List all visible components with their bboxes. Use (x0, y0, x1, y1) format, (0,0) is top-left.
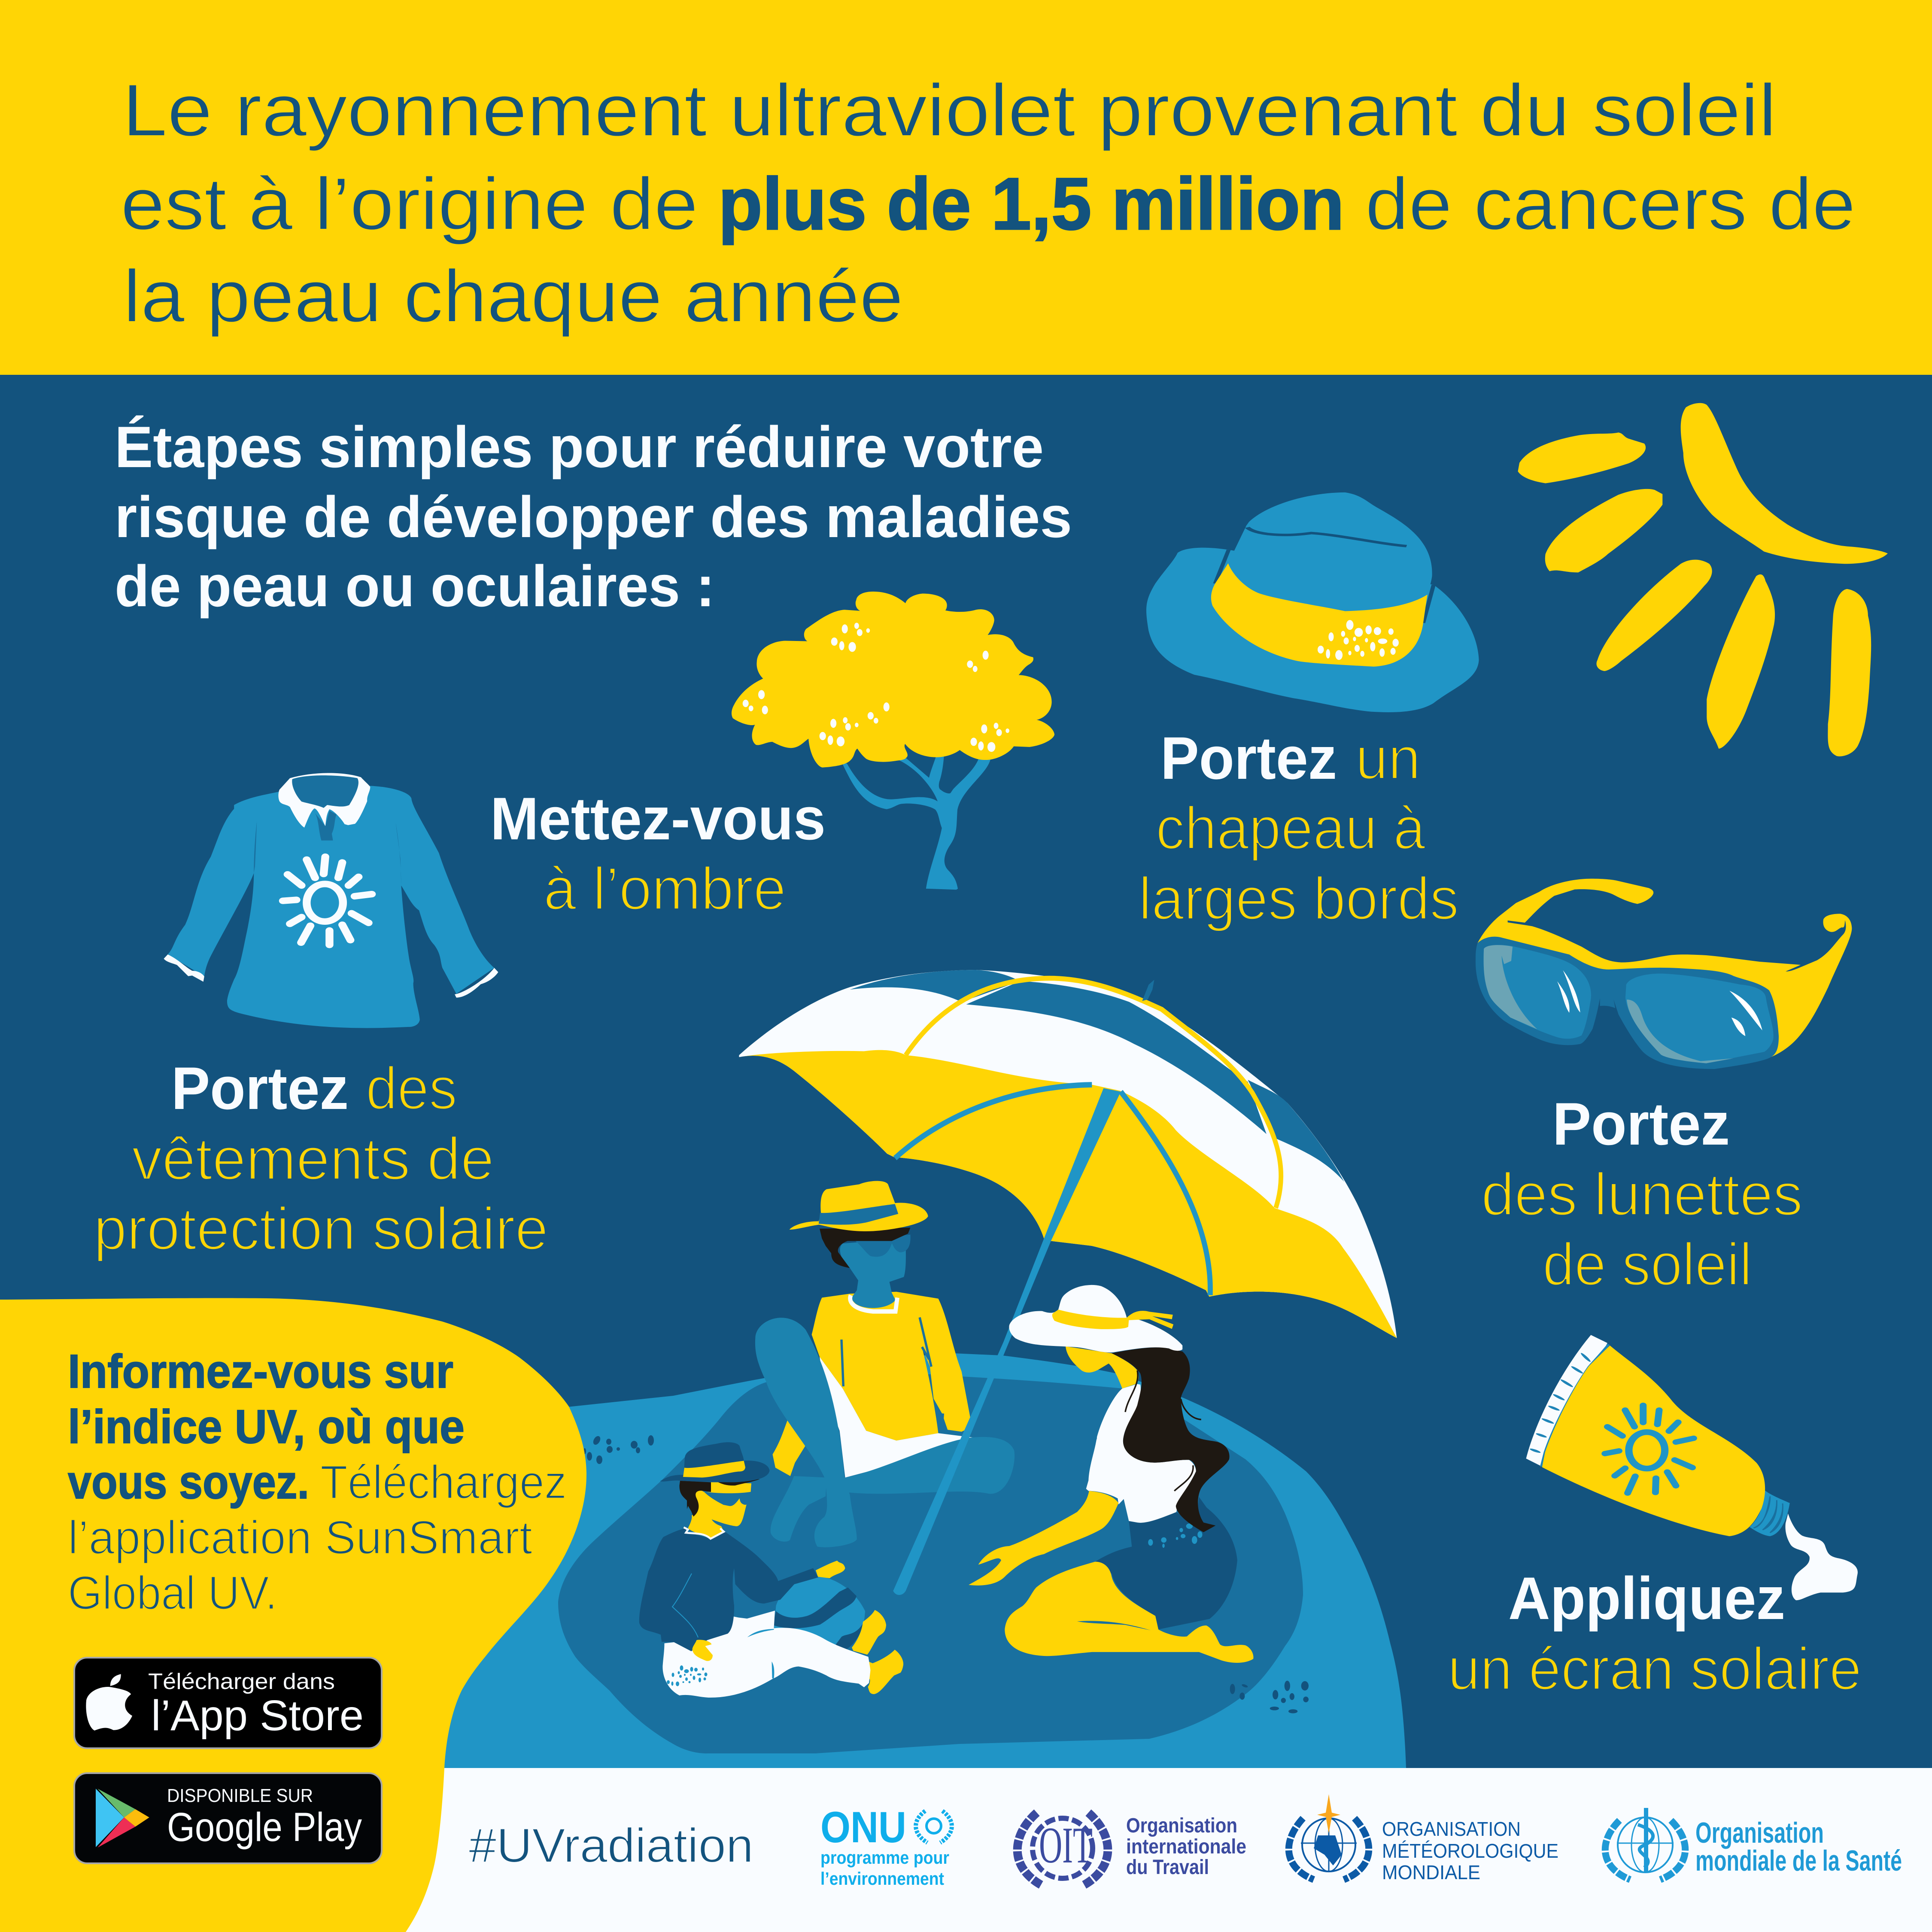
illustration: ground specks right (1230, 1681, 1309, 1713)
badge: App Store: Télécharger dans (148, 1669, 335, 1694)
woman: hair strands (1125, 1370, 1201, 1491)
icon: shirt (164, 773, 498, 1028)
umbrella: canopy (739, 970, 1397, 1338)
panel: title banner (0, 0, 1932, 375)
text: clothing: vêtements de (132, 1125, 494, 1192)
icon: hat (1146, 492, 1479, 712)
logo: UN wreath (916, 1811, 952, 1843)
child: sweater (639, 1528, 818, 1651)
logo: UN Environment: programme pour (820, 1847, 949, 1868)
text: hat: larges bords (1139, 865, 1459, 932)
man: foot shape (771, 1476, 826, 1542)
text: clothing: protection solaire (94, 1195, 548, 1262)
text: clothing (94, 1054, 548, 1262)
text: hat: chapeau à (1156, 794, 1425, 862)
woman: legs (1005, 1561, 1253, 1663)
logo: ILO (1018, 1813, 1246, 1886)
logo: UN Environment: l’environnement (820, 1868, 944, 1889)
badge: App Store: l’App Store (151, 1692, 364, 1740)
logo: WMO: MONDIALE (1382, 1861, 1480, 1883)
illustration: ground (429, 1353, 1406, 1768)
text: UV index: vous soyez. (68, 1456, 309, 1509)
man: neck and face (840, 1239, 906, 1308)
text: UV index: Informez-vous sur (68, 1345, 453, 1398)
icon: play triangle (96, 1789, 149, 1847)
child: hat band (683, 1461, 745, 1478)
text: UV index: l’application SunSmart (68, 1511, 532, 1564)
man: torso (812, 1292, 972, 1440)
panel: footer strip (0, 1768, 1932, 1932)
title: Le rayonnement ultraviolet provenant du soleil (122, 69, 1777, 152)
illustration: child (639, 1442, 903, 1698)
badge: App Store (74, 1658, 382, 1748)
badge: Google Play (74, 1773, 382, 1863)
woman: face and neck (1066, 1346, 1139, 1388)
woman: hat (1009, 1285, 1182, 1352)
title (121, 69, 1856, 337)
man: hat band (819, 1204, 898, 1225)
logo: ILO: OIT (1039, 1817, 1093, 1874)
child: trouser folds (747, 1629, 774, 1679)
illustration: umbrella (739, 970, 1397, 1595)
text: hat (1139, 724, 1459, 932)
man: raised leg (755, 1318, 857, 1547)
child: hand on ball (816, 1561, 845, 1578)
text: UV index: Téléchargez (320, 1456, 567, 1509)
child: hand (692, 1640, 713, 1661)
icon: sun (1518, 403, 1888, 756)
text: sunscreen: un écran solaire (1448, 1635, 1862, 1702)
illustration: inner ground (558, 1373, 1303, 1753)
man: hair (820, 1227, 910, 1268)
child: ball stripe (773, 1588, 857, 1628)
woman: shirt (1086, 1384, 1196, 1523)
woman: hat ribbon (1052, 1309, 1173, 1329)
man: shirt fold lines (841, 1317, 943, 1426)
text: sunglasses (1481, 1090, 1803, 1298)
child: collar (683, 1528, 724, 1539)
text: sunglasses: Portez (1552, 1090, 1730, 1157)
logo: UN Environment: ONU (820, 1803, 906, 1852)
text: sunglasses: de soleil (1543, 1230, 1752, 1298)
text: shade: à l’ombre (544, 855, 786, 922)
subheading: de peau ou oculaires : (115, 553, 715, 619)
subheading (115, 414, 1072, 619)
icon: sunscreen tube (1526, 1335, 1858, 1600)
umbrella: finial (1142, 980, 1154, 1001)
child: sweater arm line (672, 1574, 698, 1637)
text: UV index (68, 1345, 567, 1619)
text: sunscreen: Appliquez (1508, 1564, 1785, 1632)
logo: ILO: internationale (1126, 1835, 1246, 1858)
icon: tree (732, 592, 1054, 890)
umbrella: blue ribs (895, 1085, 1210, 1295)
umbrella: pole (893, 1088, 1121, 1595)
illustration: ground specks left (583, 1435, 654, 1464)
umbrella: top stripe (850, 970, 1020, 1002)
panel: UV index callout (0, 1298, 586, 1932)
child: face (688, 1482, 751, 1538)
text: UV index: l’indice UV, où que (68, 1400, 465, 1453)
badge: Google Play: Google Play (167, 1804, 362, 1850)
title: plus de 1,5 million (718, 163, 1344, 245)
subheading: risque de développer des maladies (115, 484, 1072, 550)
child: ball (774, 1577, 865, 1649)
child: ball lower stripe (835, 1624, 863, 1649)
logo: WHO: Organisation (1695, 1817, 1824, 1849)
text: shade: Mettez-vous (490, 785, 826, 852)
woman: hair (1112, 1347, 1230, 1532)
logo: WHO (1605, 1808, 1902, 1880)
badge: Google Play: DISPONIBLE SUR (167, 1785, 313, 1806)
man: hat (790, 1181, 928, 1231)
man: hand left (772, 1413, 807, 1476)
child: hat (660, 1442, 769, 1482)
woman: shorts dots (1148, 1523, 1205, 1548)
man: white waist (820, 1357, 978, 1478)
umbrella: main stripe (966, 981, 1267, 1134)
woman: sleeve fold (1094, 1428, 1097, 1447)
child: sunglasses (704, 1492, 753, 1506)
hashtag: #UVradiation (469, 1819, 753, 1872)
child: trousers (662, 1611, 871, 1698)
text: clothing: Portez (171, 1054, 349, 1122)
title: la peau chaque année (123, 255, 903, 337)
child: hair (679, 1479, 760, 1516)
umbrella: yellow rib (906, 978, 1281, 1208)
child: trouser dots (667, 1665, 708, 1686)
logo: WMO: ORGANISATION (1382, 1818, 1521, 1840)
illustration: woman (969, 1285, 1253, 1663)
text: sunscreen (1448, 1564, 1862, 1702)
title: est à l’origine de (121, 163, 698, 245)
icon: sunglasses (1476, 879, 1852, 1069)
woman: leg crease (1077, 1621, 1151, 1630)
subheading: Étapes simples pour réduire votre (115, 414, 1044, 480)
text: clothing: des (366, 1054, 457, 1122)
child: feet (852, 1610, 903, 1694)
man: sunglasses (855, 1235, 911, 1257)
woman: shorts (1095, 1497, 1237, 1629)
woman: arm (969, 1491, 1118, 1586)
text: hat: Portez (1160, 724, 1337, 792)
logo: ILO: Organisation (1126, 1814, 1237, 1837)
text: sunglasses: des lunettes (1481, 1160, 1803, 1228)
man: collar (850, 1295, 897, 1312)
text: UV index: Global UV. (68, 1567, 277, 1619)
title: de cancers de (1365, 163, 1856, 245)
umbrella: yellow panels (739, 1050, 1397, 1338)
man: lower leg (826, 1437, 1015, 1494)
icon: apple (86, 1674, 132, 1731)
illustration: man under umbrella (755, 1181, 1015, 1547)
text: hat: un (1355, 724, 1421, 792)
logo: WMO (1289, 1794, 1558, 1883)
umbrella: right stripe (1248, 1080, 1344, 1182)
logo: UN Environment (820, 1803, 952, 1889)
logo: WMO: MÉTÉOROLOGIQUE (1382, 1840, 1558, 1862)
text: shade (490, 785, 826, 922)
logo: ILO: du Travail (1126, 1856, 1209, 1879)
